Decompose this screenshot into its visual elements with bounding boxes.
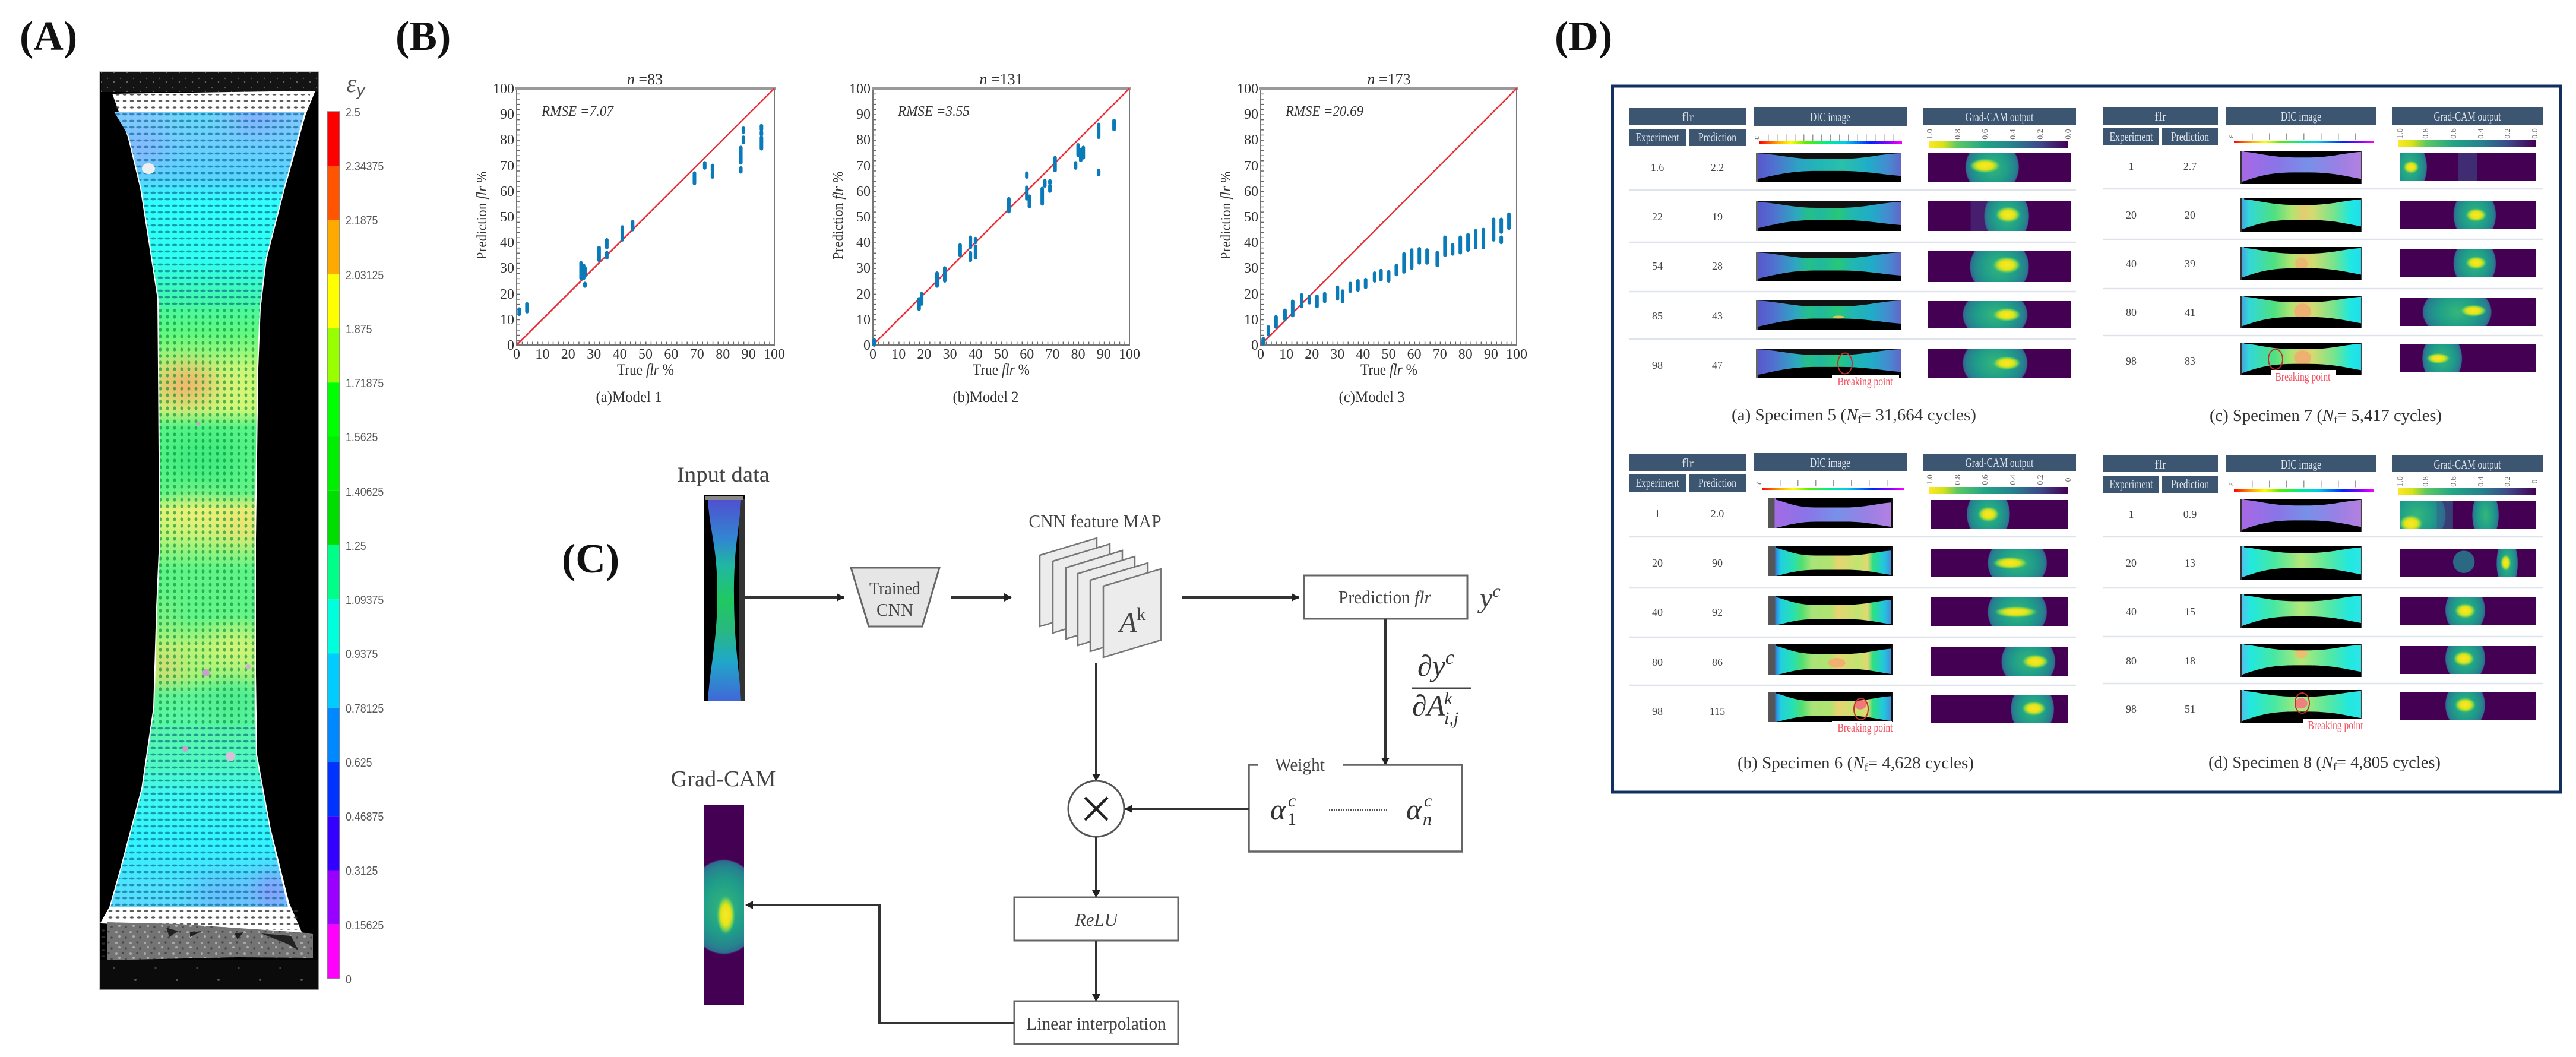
panel B chart: Model 3 [1219, 71, 1527, 406]
panel B chart: Model 2: RMSE =3.55 [897, 104, 970, 119]
colour bar for strain: 0.46875 [346, 811, 384, 824]
row flr 40: 15 [2185, 606, 2195, 618]
weight box: α [1406, 793, 1423, 826]
gradient fraction [1412, 647, 1471, 728]
sub-panel (d) specimen 8: flr [2154, 457, 2166, 471]
row flr 40 [2126, 237, 2536, 290]
panel B chart: Model 2: 70 [856, 159, 871, 174]
panel B chart: Model 3: 40 [1356, 347, 1370, 362]
panel B chart: Model 3: 10 [1244, 312, 1258, 328]
panel D: framed Grad-CAM comparison [1613, 86, 2561, 792]
ReLU box: ReLU [1074, 909, 1119, 930]
colour bar for strain: 1.71875 [346, 377, 384, 390]
row flr 22: 19 [1712, 211, 1723, 223]
sub-panel (b) specimen 6: 0 [2064, 477, 2073, 482]
sub-panel (d) specimen 8: 0.4 [2477, 476, 2486, 487]
caption (b): f [1865, 761, 1868, 773]
panel A: DIC strain field of specimen [100, 72, 319, 990]
panel B chart: Model 2: 20 [856, 287, 871, 302]
panel B chart: Model 1: 10 [500, 312, 514, 328]
caption (c): f [2334, 414, 2337, 426]
arrow: prediction to weight [1384, 619, 1387, 765]
row flr 20 [2126, 537, 2536, 590]
panel B chart: Model 2: 50 [994, 347, 1008, 362]
row flr 54: 54 [1652, 260, 1663, 272]
panel B chart: Model 2: 0 [869, 347, 876, 362]
sub-panel (d) specimen 8: Experiment [2109, 477, 2153, 491]
row flr 1 [2128, 141, 2536, 194]
sub-panel (a) specimen 5: Experiment [1635, 130, 1679, 144]
panel B chart: Model 3: RMSE =20.69 [1285, 104, 1363, 119]
sub-panel (b) specimen 6: 0.2 [2036, 474, 2045, 485]
Grad-CAM output image: Grad-CAM [671, 767, 776, 792]
panel B chart: Model 3: 60 [1244, 184, 1258, 200]
gradient fraction: ∂y [1417, 649, 1445, 682]
gradient fraction: c [1445, 647, 1454, 669]
panel B chart: Model 3: 40 [1244, 235, 1258, 251]
arrow: ReLU to linear interpolation [1095, 941, 1097, 1001]
row flr 80: 41 [2185, 306, 2195, 318]
panel B chart: Model 1: 90 [500, 107, 514, 122]
row flr 1 [1654, 487, 2068, 542]
arrow: input to CNN [745, 596, 844, 599]
panel B chart: Model 1: 0 [507, 338, 514, 353]
row flr 1.6 [1651, 140, 2071, 195]
sub-panel (a) specimen 5: 0.8 [1954, 129, 1963, 140]
input data image [677, 463, 770, 701]
row flr 1 [2128, 485, 2536, 546]
sub-panel (d) specimen 8: 1.0 [2396, 476, 2405, 487]
sub-panel (c) specimen 7: 1.0 [2396, 128, 2405, 139]
sub-panel (b) specimen 6: Grad-CAM output [1966, 455, 2034, 470]
panel B chart: Model 1: 90 [742, 347, 756, 362]
weight box [1249, 754, 1462, 852]
sub-panel (b) specimen 6: DIC image [1810, 455, 1850, 470]
row flr 1: 2.0 [1711, 508, 1724, 520]
panel B chart: Model 3: 90 [1484, 347, 1498, 362]
panel B chart: Model 3: 80 [1458, 347, 1473, 362]
panel B chart: Model 1: n =83 [627, 71, 663, 88]
panel B chart: Model 2: 100 [849, 81, 871, 97]
panel B chart: Model 3: 100 [1237, 81, 1258, 97]
panel B chart: Model 1: 30 [587, 347, 601, 362]
colour bar for strain: 0.9375 [346, 648, 378, 661]
row flr 80: 86 [1712, 656, 1723, 668]
panel label D: (D) [1555, 14, 1612, 59]
caption (c): (c) Specimen 7 (N [2210, 407, 2334, 425]
caption (d): f [2333, 761, 2337, 773]
arrow: CNN to feature map [951, 596, 1011, 599]
panel B chart: Model 1: 80 [716, 347, 730, 362]
panel B chart: Model 1: 100 [764, 347, 785, 362]
row flr 40: 92 [1712, 606, 1723, 618]
caption (a): (a) Specimen 5 ( N [1732, 406, 1857, 425]
sub-panel (a) specimen 5: 0.0 [2064, 129, 2073, 140]
row flr 98 with breaking point: 98 [2126, 355, 2137, 367]
row flr 98 with breaking point: Breaking point [1837, 721, 1893, 735]
caption (a): = 31,664 cycles) [1862, 406, 1976, 425]
row flr 40: 39 [2185, 258, 2195, 270]
colour bar for strain: 0.3125 [346, 865, 378, 878]
row flr 98 with breaking point: Breaking point [2276, 371, 2331, 384]
colour bar for strain: 2.03125 [346, 269, 384, 282]
sub-panel (d) specimen 8: 0.8 [2422, 476, 2431, 487]
row flr 98 with breaking point: 47 [1712, 359, 1723, 371]
arrow: linear interpolation to Grad-CAM [746, 905, 1014, 1023]
panel B chart: Model 3: 50 [1381, 347, 1395, 362]
CNN feature map stack: k [1137, 605, 1145, 624]
trained CNN trapezoid: Trained [869, 578, 920, 599]
sub-panel (d) specimen 8: 0 [2531, 480, 2540, 483]
row flr 1: 0.9 [2183, 508, 2197, 520]
prediction box: Prediction flr [1338, 587, 1432, 607]
output y^c: c [1492, 581, 1501, 601]
panel B chart: Model 3: (c)Model 3 [1338, 388, 1405, 406]
panel C: Grad-CAM flow diagram [671, 463, 1501, 1044]
row flr 40: 40 [2126, 606, 2137, 618]
gradient fraction: i,j [1444, 708, 1458, 728]
row flr 1: 1 [2128, 160, 2134, 172]
panel B chart: Model 3: 30 [1244, 261, 1258, 276]
caption (b): (b) Specimen 6 (N [1738, 754, 1864, 773]
row flr 98 with breaking point [2126, 680, 2536, 732]
panel B chart: Model 2: Prediction flr % [831, 171, 846, 260]
row flr 80 [2126, 286, 2536, 338]
sub-panel (b) specimen 6 [1629, 453, 2076, 773]
row flr 20: 13 [2185, 557, 2195, 569]
sub-panel (b) specimen 6: ε [1755, 481, 1764, 485]
panel B chart: Model 1: 20 [500, 287, 514, 302]
caption (d): = 4,805 cycles) [2337, 754, 2441, 772]
row flr 98 with breaking point: 98 [1652, 705, 1663, 717]
row flr 20: 20 [2126, 209, 2137, 221]
panel B chart: Model 1: 50 [500, 210, 514, 225]
caption (d): (d) Specimen 8 (N [2208, 754, 2333, 772]
colour bar for strain: 2.5 [346, 106, 360, 119]
sub-panel (c) specimen 7: 0.8 [2422, 128, 2431, 139]
colour bar for strain: 1.40625 [346, 486, 384, 499]
sub-panel (c) specimen 7: ε [2227, 135, 2236, 138]
colour bar for strain: 1.09375 [346, 594, 384, 607]
panel B chart: Model 2: 10 [856, 312, 871, 328]
weight box: c [1424, 791, 1432, 811]
sub-panel (d) specimen 8: 0.2 [2504, 476, 2512, 487]
panel B chart: Model 3: 0 [1251, 338, 1258, 353]
panel B chart: Model 1: 10 [535, 347, 549, 362]
sub-panel (b) specimen 6: 0.8 [1954, 474, 1963, 485]
sub-panel (c) specimen 7: Prediction [2171, 129, 2209, 144]
prediction box [1304, 575, 1467, 619]
row flr 80: 80 [2126, 306, 2137, 318]
gradient fraction: ∂A [1412, 689, 1445, 722]
colour bar for strain: 2.34375 [346, 160, 384, 173]
panel B chart: Model 1: Prediction flr % [474, 171, 490, 260]
colour bar for strain: y [355, 81, 366, 99]
weight box: 1 [1287, 809, 1296, 829]
row flr 1.6: 2.2 [1711, 162, 1724, 173]
sub-panel (c) specimen 7: 0.2 [2504, 128, 2512, 139]
arrow: feature map to multiply [1095, 663, 1097, 781]
panel B chart: Model 1: 40 [500, 235, 514, 251]
panel B chart: Model 2: 30 [943, 347, 957, 362]
sub-panel (b) specimen 6: Prediction [1698, 476, 1736, 490]
gradient fraction: k [1444, 689, 1452, 708]
row flr 80: 18 [2185, 655, 2195, 667]
output y^c: y [1480, 583, 1492, 614]
row flr 98 with breaking point: Breaking point [1837, 375, 1893, 388]
row flr 98 with breaking point: 98 [1652, 359, 1663, 371]
sub-panel (d) specimen 8 [2103, 455, 2543, 773]
sub-panel (d) specimen 8: 0.6 [2450, 476, 2458, 487]
row flr 40 [2126, 585, 2536, 635]
colour bar for strain: 1.25 [346, 540, 366, 553]
Grad-CAM output image [671, 767, 776, 1005]
ReLU box [1014, 897, 1178, 941]
sub-panel (c) specimen 7: 0.0 [2531, 128, 2540, 139]
arrow: weight to multiply [1125, 808, 1249, 810]
row flr 98 with breaking point [2126, 332, 2536, 385]
sub-panel (a) specimen 5: ε [1752, 136, 1761, 140]
panel B chart: Model 3: 20 [1244, 287, 1258, 302]
panel B chart: Model 2: 60 [856, 184, 871, 200]
panel B chart: Model 3: 50 [1244, 210, 1258, 225]
panel B chart: Model 2: 10 [891, 347, 906, 362]
panel B chart: Model 2: 50 [856, 210, 871, 225]
sub-panel (c) specimen 7: Experiment [2109, 129, 2153, 144]
sub-panel (a) specimen 5: 0.6 [1981, 129, 1990, 140]
row flr 1.6: 1.6 [1651, 162, 1664, 173]
panel B chart: Model 1: 40 [613, 347, 627, 362]
row flr 20 [2126, 188, 2536, 242]
panel B chart: Model 2: n =131 [979, 71, 1023, 88]
panel B chart: Model 2: 100 [1119, 347, 1140, 362]
panel B chart: Model 2: 80 [1071, 347, 1086, 362]
panel B chart: Model 3: 100 [1506, 347, 1527, 362]
panel B chart: Model 2: 90 [856, 107, 871, 122]
row flr 22: 22 [1652, 211, 1663, 223]
panel B chart: Model 3: n =173 [1367, 71, 1411, 88]
sub-panel (c) specimen 7: DIC image [2281, 109, 2321, 124]
panel B chart: Model 3: 70 [1433, 347, 1447, 362]
panel B chart: Model 3: True flr % [1360, 361, 1417, 378]
colour bar for strain: 0.625 [346, 757, 372, 770]
panel B chart: Model 2: 70 [1045, 347, 1059, 362]
sub-panel (a) specimen 5 [1629, 107, 2076, 425]
row flr 80 [2126, 634, 2536, 683]
weight box: n [1423, 809, 1432, 829]
row flr 85: 85 [1652, 310, 1663, 322]
panel B chart: Model 1: RMSE =7.07 [541, 104, 614, 119]
row flr 98 with breaking point: 98 [2126, 703, 2137, 715]
CNN feature map stack [1028, 511, 1162, 657]
input data image: Input data [677, 463, 770, 486]
row flr 20 [1652, 536, 2068, 590]
sub-panel (b) specimen 6: flr [1682, 456, 1694, 470]
panel B chart: Model 1: 70 [690, 347, 704, 362]
row flr 20: 20 [2126, 557, 2137, 569]
sub-panel (d) specimen 8: DIC image [2281, 457, 2321, 471]
panel B chart: Model 1: True flr % [617, 361, 674, 378]
row flr 40: 40 [1652, 606, 1663, 618]
multiply node [1068, 781, 1124, 837]
panel B chart: Model 3: 70 [1244, 159, 1258, 174]
sub-panel (c) specimen 7: Grad-CAM output [2433, 109, 2501, 124]
row flr 54 [1652, 238, 2071, 296]
panel B chart: Model 2 [831, 71, 1140, 406]
panel B chart: Model 3: 20 [1305, 347, 1319, 362]
panel B chart: Model 1 [474, 71, 785, 406]
sub-panel (b) specimen 6: 1.0 [1926, 474, 1935, 485]
row flr 98 with breaking point: 51 [2185, 703, 2195, 715]
colour bar for strain: 0.15625 [346, 919, 384, 932]
row flr 1: 1 [1654, 508, 1660, 520]
CNN feature map stack: A [1119, 607, 1137, 638]
linear interpolation box: Linear interpolation [1026, 1013, 1166, 1034]
arrow: feature map to prediction [1182, 596, 1299, 599]
sub-panel (a) specimen 5: DIC image [1810, 110, 1850, 124]
panel B chart: Model 2: 40 [969, 347, 983, 362]
arrow: multiply to ReLU [1095, 837, 1097, 897]
panel label B: (B) [395, 14, 451, 59]
colour bar for strain: 0.78125 [346, 702, 384, 716]
sub-panel (a) specimen 5: flr [1682, 110, 1694, 124]
colour bar for strain: 0 [346, 973, 352, 986]
caption (b): = 4,628 cycles) [1868, 754, 1974, 773]
row flr 98 with breaking point: 83 [2185, 355, 2195, 367]
panel B chart: Model 2: True flr % [973, 361, 1030, 378]
row flr 22 [1652, 188, 2071, 245]
panel B chart: Model 2: 40 [856, 235, 871, 251]
caption (c): = 5,417 cycles) [2337, 407, 2442, 425]
sub-panel (c) specimen 7: 0.6 [2450, 128, 2458, 139]
row flr 85: 43 [1712, 310, 1723, 322]
trained CNN trapezoid [851, 568, 939, 626]
row flr 20: 90 [1712, 557, 1723, 569]
CNN feature map stack: CNN feature MAP [1028, 511, 1162, 531]
panel B chart: Model 1: 80 [500, 132, 514, 148]
row flr 1: 2.7 [2183, 160, 2197, 172]
caption (a): f [1857, 413, 1862, 425]
panel B chart: Model 3: 0 [1257, 347, 1264, 362]
panel B chart: Model 2: 90 [1097, 347, 1111, 362]
sub-panel (a) specimen 5: Grad-CAM output [1966, 110, 2034, 124]
panel B chart: Model 2: 30 [856, 261, 871, 276]
sub-panel (a) specimen 5: Prediction [1698, 130, 1736, 144]
panel B chart: Model 2: (b)Model 2 [952, 388, 1019, 406]
panel B chart: Model 3: Prediction flr % [1219, 171, 1234, 260]
row flr 98 with breaking point: 115 [1710, 705, 1725, 717]
weight box: c [1288, 791, 1296, 811]
row flr 54: 28 [1712, 260, 1723, 272]
sub-panel (a) specimen 5: 0.2 [2036, 129, 2045, 140]
row flr 98 with breaking point [1652, 336, 2071, 391]
panel B chart: Model 3: 10 [1279, 347, 1293, 362]
sub-panel (c) specimen 7: 0.4 [2477, 128, 2486, 139]
panel B chart: Model 1: 60 [500, 184, 514, 200]
row flr 98 with breaking point: Breaking point [2308, 719, 2363, 732]
row flr 80: 80 [2126, 655, 2137, 667]
panel B chart: Model 2: 20 [917, 347, 931, 362]
colour bar for strain: 1.875 [346, 323, 372, 336]
sub-panel (d) specimen 8: ε [2227, 482, 2236, 486]
panel B chart: Model 3: 80 [1244, 132, 1258, 148]
sub-panel (b) specimen 6: Experiment [1635, 476, 1679, 490]
colour bar for strain: ε [346, 69, 356, 98]
panel B chart: Model 2: 0 [863, 338, 871, 353]
sub-panel (c) specimen 7: flr [2154, 109, 2166, 124]
weight box: α [1270, 793, 1287, 826]
row flr 80 [1652, 634, 2068, 689]
panel label C: (C) [562, 536, 619, 582]
sub-panel (b) specimen 6: 0.6 [1981, 474, 1990, 485]
panel B chart: Model 1: 70 [500, 159, 514, 174]
row flr 85 [1652, 289, 2071, 341]
panel B chart: Model 1: 30 [500, 261, 514, 276]
panel B chart: Model 3: 90 [1244, 107, 1258, 122]
panel B chart: Model 2: 60 [1020, 347, 1034, 362]
colour bar for strain: 1.5625 [346, 431, 378, 444]
sub-panel (c) specimen 7 [2103, 107, 2543, 426]
panel B chart: Model 1: 50 [638, 347, 653, 362]
row flr 98 with breaking point [1652, 682, 2068, 736]
row flr 40: 40 [2126, 258, 2137, 270]
row flr 1: 1 [2128, 508, 2134, 520]
panel label A: (A) [20, 14, 77, 59]
panel B chart: Model 1: 100 [493, 81, 514, 97]
sub-panel (a) specimen 5: 1.0 [1926, 129, 1935, 140]
panel B chart: Model 3: 30 [1330, 347, 1344, 362]
colour bar for strain [327, 69, 384, 986]
panel B chart: Model 2: 80 [856, 132, 871, 148]
panel B chart: Model 1: 60 [664, 347, 678, 362]
panel B chart: Model 1: 0 [513, 347, 520, 362]
row flr 80: 80 [1652, 656, 1663, 668]
row flr 20: 20 [1652, 557, 1663, 569]
row flr 20: 20 [2185, 209, 2195, 221]
colour bar for strain: 2.1875 [346, 214, 378, 227]
panel B chart: Model 1: 20 [561, 347, 575, 362]
sub-panel (a) specimen 5: 0.4 [2009, 129, 2018, 140]
trained CNN trapezoid: CNN [876, 599, 913, 620]
weight box: Weight [1275, 754, 1325, 775]
panel B chart: Model 3: 60 [1407, 347, 1422, 362]
row flr 40 [1652, 584, 2068, 640]
sub-panel (d) specimen 8: Prediction [2171, 477, 2209, 491]
sub-panel (b) specimen 6: 0.4 [2009, 474, 2018, 485]
linear interpolation box [1014, 1001, 1178, 1044]
panel B chart: Model 1: (a)Model 1 [596, 388, 662, 406]
sub-panel (d) specimen 8: Grad-CAM output [2433, 457, 2501, 471]
